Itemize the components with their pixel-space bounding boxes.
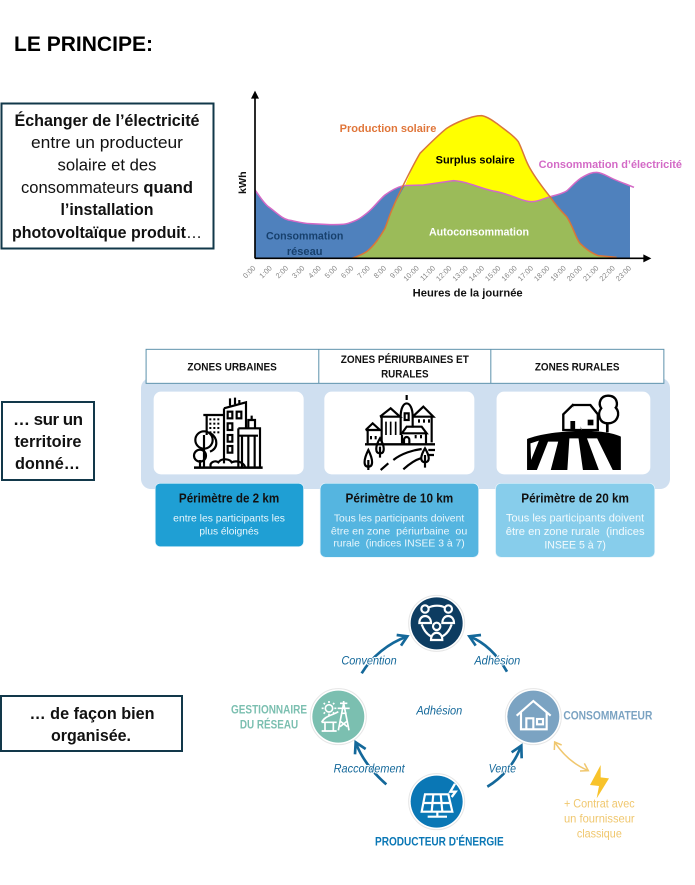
label: supplier contract bbox=[564, 798, 635, 840]
label: surplus solaire: Surplus solaire bbox=[436, 154, 515, 166]
x axis hour labels: 8:00 bbox=[372, 264, 388, 280]
label: consommation réseau: réseau bbox=[287, 246, 323, 258]
arrow: producer to consumer bbox=[487, 746, 522, 787]
box: perimeter 10 km: rurale (indices INSEE 3 à 7) bbox=[333, 539, 465, 550]
arrow: consumer to community bbox=[469, 635, 507, 672]
x axis hour labels: 0:00 bbox=[241, 264, 257, 280]
self-consumption area bbox=[352, 181, 617, 258]
box: perimeter 10 km: Périmètre de 10 km bbox=[346, 491, 453, 506]
box: perimeter 10 km: Tous les participants doivent bbox=[334, 514, 464, 525]
box: perimeter 2 km: entre les participants les bbox=[173, 514, 285, 525]
label: gestionnaire du réseau bbox=[231, 702, 307, 731]
text box: exchange electricity: consommateurs quand bbox=[21, 178, 193, 197]
x axis hour labels: 23:00 bbox=[614, 264, 633, 283]
label: gestionnaire du réseau: DU RÉSEAU bbox=[240, 716, 298, 731]
x axis hour labels: 10:00 bbox=[401, 264, 421, 283]
node: producer bbox=[409, 774, 465, 830]
icon: lightning bolt bbox=[590, 765, 609, 798]
label: consommation réseau: Consommation bbox=[266, 231, 343, 243]
x axis hour labels: 20:00 bbox=[565, 264, 584, 283]
zone header row: ZONES RURALES bbox=[535, 361, 620, 373]
node: consumer bbox=[505, 689, 561, 745]
text box: territory: … sur un bbox=[13, 410, 83, 429]
text box: exchange electricity bbox=[2, 104, 214, 248]
x axis hour labels: 12:00 bbox=[434, 264, 453, 283]
label: consommation réseau bbox=[266, 231, 343, 258]
x axis hour labels: 18:00 bbox=[532, 264, 551, 283]
x axis hour labels: 14:00 bbox=[467, 264, 486, 283]
label: consommation d'électricité: Consommation d’électricité bbox=[539, 159, 682, 171]
label: supplier contract: + Contrat avec bbox=[564, 798, 635, 811]
text box: exchange electricity: photovoltaïque produit… bbox=[12, 223, 202, 242]
x axis hour labels: 17:00 bbox=[516, 264, 535, 283]
consumption area (grid) bbox=[255, 172, 630, 258]
card: rural icon bbox=[497, 392, 650, 474]
y axis label: kWh bbox=[238, 171, 249, 194]
arrow label: convention: Convention bbox=[341, 653, 397, 667]
x axis hour labels: 13:00 bbox=[450, 264, 470, 283]
axes bbox=[251, 91, 651, 262]
arrow: producer to grid operator bbox=[355, 742, 386, 784]
x axis hour labels: 11:00 bbox=[418, 264, 437, 283]
box: perimeter 20 km: Tous les participants doivent bbox=[506, 513, 644, 525]
box: perimeter 20 km bbox=[496, 483, 655, 557]
x axis hour labels: 22:00 bbox=[597, 264, 617, 283]
zone header row: ZONES PÉRIURBAINES ET bbox=[341, 353, 469, 366]
arrow: supplier contract bbox=[554, 742, 588, 771]
x axis hour labels: 9:00 bbox=[388, 264, 404, 280]
x axis hour labels: 2:00 bbox=[274, 264, 290, 280]
box: perimeter 20 km: Périmètre de 20 km bbox=[521, 491, 629, 506]
label: consommateur: CONSOMMATEUR bbox=[563, 708, 652, 722]
panel: territory zones bbox=[141, 349, 670, 557]
background band bbox=[141, 378, 670, 489]
x axis hour labels: 5:00 bbox=[323, 264, 339, 280]
arrow label: adhésion right: Adhésion bbox=[473, 653, 521, 667]
production curve bbox=[352, 116, 617, 258]
center label: adhésion: Adhésion bbox=[415, 703, 463, 717]
x axis hour labels: 6:00 bbox=[339, 264, 355, 280]
card: urban icon bbox=[154, 392, 304, 474]
text box: territory bbox=[2, 402, 94, 480]
x axis hour labels: 15:00 bbox=[483, 264, 502, 283]
label: supplier contract: classique bbox=[577, 827, 622, 840]
arrow label: vente: Vente bbox=[489, 762, 516, 776]
text box: exchange electricity: l’installation bbox=[60, 200, 154, 219]
zone header row: RURALES bbox=[381, 369, 429, 381]
diagram: actors cycle bbox=[231, 595, 652, 848]
box: perimeter 2 km: Périmètre de 2 km bbox=[179, 491, 279, 506]
label: autoconsommation: Autoconsommation bbox=[429, 227, 529, 239]
text box: exchange electricity: Échanger de l’électricité bbox=[14, 111, 200, 130]
text box: organised bbox=[1, 696, 182, 751]
title: LE PRINCIPE: bbox=[14, 33, 153, 56]
consumption curve bbox=[255, 172, 634, 225]
arrow: grid operator to community bbox=[362, 635, 407, 673]
box: perimeter 20 km: INSEE 5 à 7) bbox=[544, 539, 606, 551]
x axis hour labels: 7:00 bbox=[355, 264, 372, 280]
x axis hour labels: 1:00 bbox=[257, 264, 274, 280]
x axis hour labels: 4:00 bbox=[306, 264, 323, 280]
arrow label: raccordement: Raccordement bbox=[334, 761, 405, 775]
zone header row: ZONES URBAINES bbox=[187, 361, 277, 373]
label: gestionnaire du réseau: GESTIONNAIRE bbox=[231, 702, 307, 716]
solar surplus area bbox=[405, 116, 550, 202]
box: perimeter 10 km bbox=[320, 483, 479, 557]
text box: organised: organisée. bbox=[51, 726, 131, 745]
text box: territory: donné… bbox=[15, 454, 80, 473]
x axis hour labels: 19:00 bbox=[548, 264, 568, 283]
box: perimeter 2 km bbox=[155, 483, 304, 547]
box: perimeter 20 km: être en zone rurale (indices bbox=[506, 526, 645, 538]
x axis hour labels: 21:00 bbox=[581, 264, 600, 283]
text box: exchange electricity: solaire et des bbox=[58, 156, 156, 174]
text box: exchange electricity: entre un producteur bbox=[31, 133, 183, 152]
zone header row bbox=[146, 349, 664, 383]
area chart: solar production and consumption bbox=[238, 91, 682, 299]
label: producteur d'énergie: PRODUCTEUR D'ÉNERGIE bbox=[375, 833, 504, 848]
x axis hour labels: 3:00 bbox=[290, 264, 306, 280]
text box: organised: … de façon bien bbox=[30, 704, 154, 723]
text box: territory: territoire bbox=[14, 432, 82, 451]
node: grid operator bbox=[310, 689, 366, 745]
x axis hour labels bbox=[241, 264, 633, 283]
x axis hour labels: 16:00 bbox=[499, 264, 519, 283]
arrows between actors bbox=[355, 635, 522, 787]
label: production solaire: Production solaire bbox=[340, 123, 436, 135]
box: perimeter 10 km: être en zone périurbaine ou bbox=[331, 526, 468, 537]
box: perimeter 2 km: plus éloignés bbox=[199, 526, 259, 537]
x axis title: Heures de la journée bbox=[413, 287, 523, 299]
node: community bbox=[409, 595, 465, 651]
card: peri-urban icon bbox=[324, 392, 474, 474]
label: supplier contract: un fournisseur bbox=[564, 813, 635, 826]
